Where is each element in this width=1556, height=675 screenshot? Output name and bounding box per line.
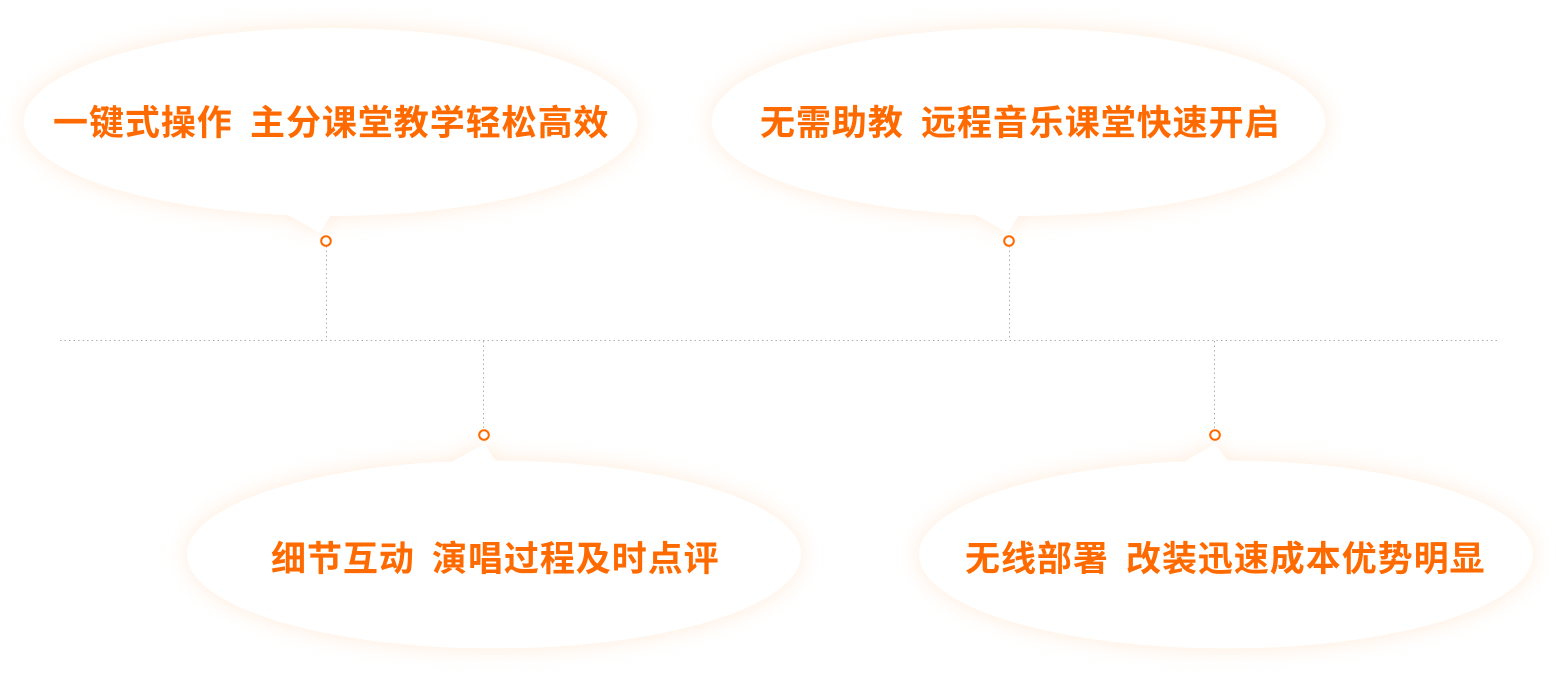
timeline axis <box>60 246 1498 430</box>
callout: no assistant needed <box>712 28 1326 233</box>
text: no assistant needed: 无需助教 <box>760 104 904 143</box>
text: wireless deployment: 无线部署 <box>965 540 1109 579</box>
text: one-key operation: 主分课堂教学轻松高效 <box>250 104 610 143</box>
marker: node four <box>1210 430 1220 440</box>
text: one-key operation: 一键式操作 <box>53 104 233 143</box>
callout: detailed interaction <box>187 444 801 648</box>
marker: node three <box>479 430 489 440</box>
marker: node one <box>321 236 331 246</box>
text: detailed interaction: 演唱过程及时点评 <box>432 540 720 579</box>
callout: one-key operation <box>24 28 638 233</box>
text: no assistant needed: 远程音乐课堂快速开启 <box>921 104 1281 143</box>
text: wireless deployment: 改装迅速成本优势明显 <box>1126 540 1486 579</box>
marker: node two <box>1004 236 1014 246</box>
callout: wireless deployment <box>919 444 1533 648</box>
text: detailed interaction: 细节互动 <box>271 540 415 579</box>
